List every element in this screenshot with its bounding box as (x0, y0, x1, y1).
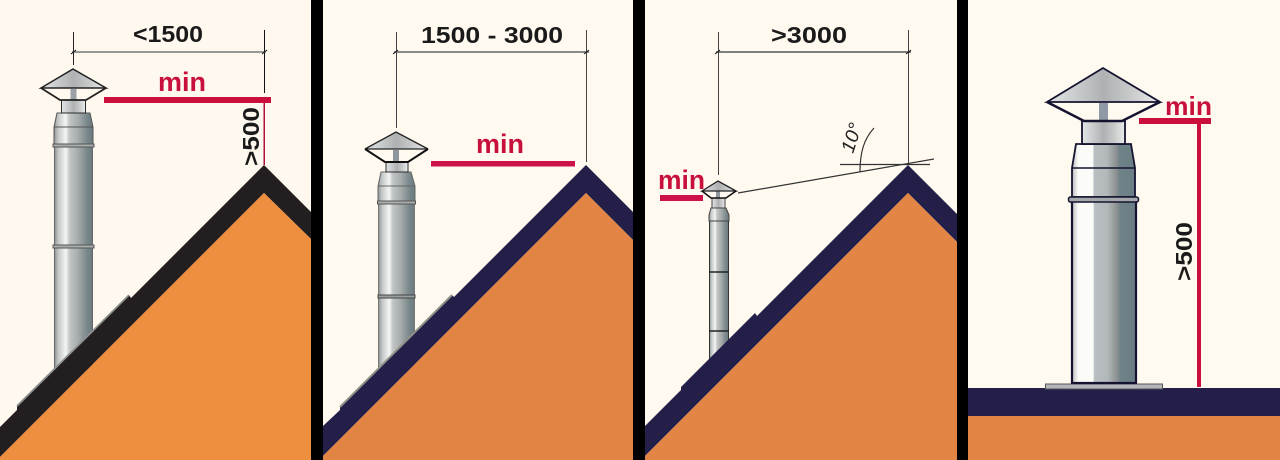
flashing (17, 295, 129, 406)
dimension lines (715, 30, 911, 175)
label: 10 degrees: 10° (838, 120, 867, 156)
label: min: min (158, 67, 206, 97)
panel: over 3000 (645, 0, 957, 460)
panel: flat roof (968, 0, 1280, 460)
roof (645, 165, 957, 460)
chimney (41, 69, 106, 370)
red min line (1139, 118, 1211, 124)
roof (0, 165, 312, 460)
label: min: min (476, 129, 524, 159)
label: over 3000: >3000 (771, 22, 847, 48)
panel: 1500 to 3000 (323, 0, 633, 460)
chimney (1046, 68, 1162, 389)
dimension lines (71, 30, 267, 93)
angle lines (738, 128, 934, 193)
roof (323, 165, 633, 460)
panel: under 1500 (0, 0, 312, 460)
red min line (431, 161, 575, 166)
flashing (340, 295, 452, 407)
flat roof (968, 388, 1280, 460)
chimney (702, 181, 736, 366)
red min line (660, 195, 703, 201)
red min line (104, 97, 271, 103)
label: over 500: >500 (238, 107, 264, 166)
label: under 1500: <1500 (133, 21, 203, 47)
label: over 500: >500 (1171, 222, 1197, 281)
label: min: min (1165, 91, 1212, 121)
dimension lines (393, 30, 589, 162)
label: min: min (658, 165, 705, 195)
panel dividers (311, 0, 968, 460)
label: 1500 to 3000: 1500 - 3000 (421, 22, 563, 48)
chimney (365, 132, 428, 373)
red height line (264, 103, 265, 165)
red height line (1197, 124, 1201, 387)
